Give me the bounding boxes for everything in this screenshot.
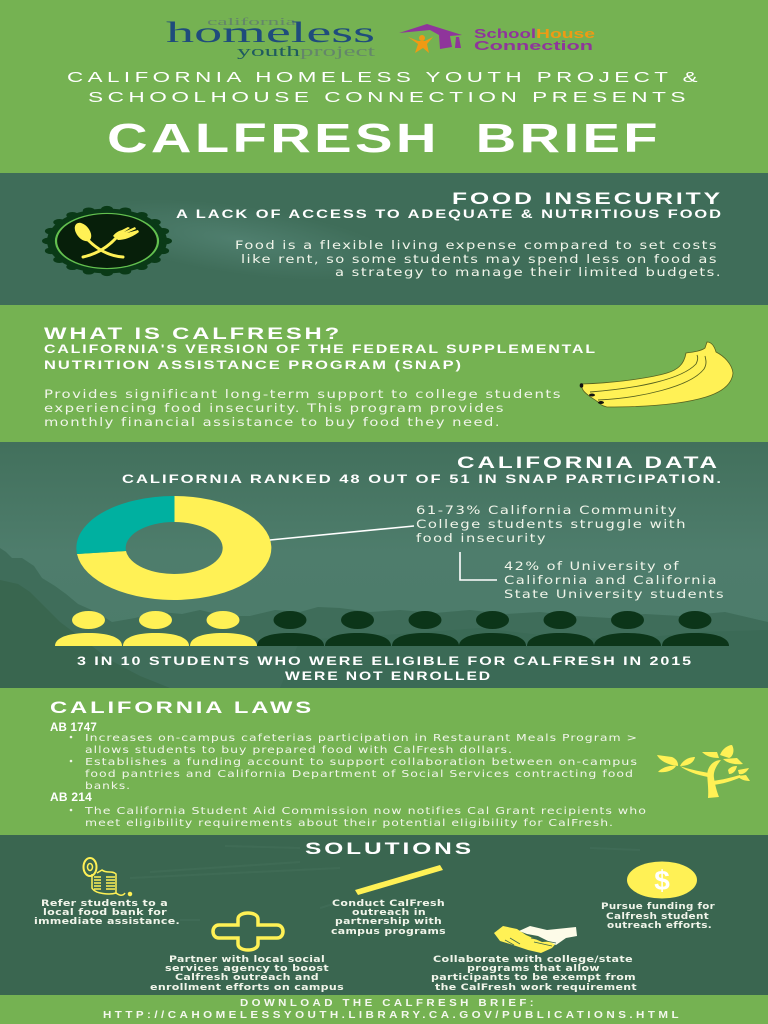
footer: download link: DOWNLOAD THE CALFRESH BRIEF: <box>240 998 537 1009</box>
presenter line: SCHOOLHOUSE CONNECTION PRESENTS <box>88 89 690 106</box>
panel: california data <box>0 442 768 688</box>
panel: solutions <box>0 835 768 995</box>
label: partnership with <box>335 917 442 927</box>
law: AB 1747: banks. <box>85 781 131 792</box>
law: AB 214: The California Student Aid Commission now notifies Cal Grant recipients who <box>84 806 647 817</box>
label: Conduct CalFresh <box>332 899 445 909</box>
title: CALFRESH BRIEF <box>107 115 661 161</box>
logo: SchoolHouse Connection: Connection <box>474 39 593 53</box>
label: services agency to boost <box>165 964 330 974</box>
presenter line: CALIFORNIA HOMELESS YOUTH PROJECT & <box>67 69 702 86</box>
callout: community college statistic <box>416 503 687 545</box>
law: AB 214 <box>50 790 647 829</box>
footer: download link: HTTP://CAHOMELESSYOUTH.LIBRARY.CA.GOV/PUBLICATIONS.HTML <box>103 1010 682 1021</box>
body text: like rent, so some students may spend less on food as <box>241 252 718 266</box>
law: AB 1747: Establishes a funding account to support collaboration between on-campus <box>85 757 638 768</box>
header <box>67 16 702 161</box>
solution: collaboration <box>431 926 638 993</box>
heading: CALIFORNIA LAWS <box>50 698 314 717</box>
callout connector <box>460 552 497 580</box>
label <box>431 955 638 993</box>
law: AB 1747: AB 1747 <box>50 720 97 734</box>
heading: CALIFORNIA DATA <box>457 453 720 472</box>
label <box>34 899 180 927</box>
footer: download link <box>103 998 682 1021</box>
label: outreach efforts. <box>607 921 712 931</box>
pictogram caption: WERE NOT ENROLLED <box>285 671 492 683</box>
label: programs that allow <box>467 964 600 974</box>
logo: SchoolHouse Connection: House <box>536 27 595 41</box>
body text: a strategy to manage their limited budgets. <box>335 265 722 279</box>
label <box>601 902 715 931</box>
label: enrollment efforts on campus <box>150 983 344 993</box>
body text: monthly financial assistance to buy food they need. <box>44 415 501 429</box>
icon: spoon and fork badge <box>47 209 167 273</box>
presenter line <box>67 69 702 106</box>
icon: ruler <box>355 865 443 895</box>
pictogram caption: 3 IN 10 STUDENTS WHO WERE ELIGIBLE FOR CALFRESH IN 2015 <box>77 656 693 668</box>
icon: tree <box>657 745 750 798</box>
law: AB 1747: food pantries and California Department of Social Services contracting food <box>85 769 634 780</box>
label: Collaborate with college/state <box>433 955 633 965</box>
law: AB 1747 <box>50 720 638 792</box>
label: campus programs <box>331 927 446 937</box>
callout: university statistic: California and California <box>504 573 718 587</box>
logo: SchoolHouse Connection: School <box>474 27 536 41</box>
label: Pursue funding for <box>601 902 715 912</box>
law: AB 1747: Increases on-campus cafeterias participation in Restaurant Meals Program > <box>85 733 638 744</box>
body text <box>44 387 562 429</box>
label: participants to be exempt from <box>431 973 636 983</box>
law: AB 1747: allows students to buy prepared food with CalFresh dollars. <box>85 745 513 756</box>
panel: what is calfresh <box>44 324 733 429</box>
subheading: CALIFORNIA'S VERSION OF THE FEDERAL SUPPLEMENTAL <box>44 344 597 356</box>
pictogram: 3 in 10 students <box>55 611 729 646</box>
logo: California Homeless Youth Project: project <box>300 44 376 60</box>
callout line <box>270 526 414 540</box>
heading: SOLUTIONS <box>305 839 474 858</box>
solution: funding <box>601 862 715 931</box>
callout: university statistic <box>504 559 725 601</box>
body text: experiencing food insecurity. This program provides <box>44 401 505 415</box>
label: Partner with local social <box>169 955 325 965</box>
pictogram caption <box>77 656 693 683</box>
label: outreach in <box>352 908 426 918</box>
logo: California Homeless Youth Project: youth <box>237 44 301 60</box>
body text <box>235 238 722 279</box>
body text: Provides significant long-term support to college students <box>44 387 562 401</box>
icon: dollar coin: $ <box>654 865 670 896</box>
icon: banana <box>580 342 733 407</box>
label: Refer students to a <box>41 899 168 909</box>
label <box>150 955 344 993</box>
icon: handshake <box>494 926 577 953</box>
label: Calfresh student <box>606 912 709 922</box>
law: AB 214: meet eligibility requirements about their potential eligibility for CalFresh. <box>85 818 614 829</box>
solution: food bank <box>34 858 180 927</box>
callout: university statistic: 42% of University of <box>504 559 680 573</box>
logo: California Homeless Youth Project <box>166 16 376 60</box>
donut chart <box>76 496 271 600</box>
body text: Food is a flexible living expense compared to set costs <box>235 238 718 252</box>
label <box>331 899 446 937</box>
icon: canned food <box>84 858 132 896</box>
callout: university statistic: State University students <box>504 587 725 601</box>
heading: WHAT IS CALFRESH? <box>44 324 342 343</box>
logo: California Homeless Youth Project: homeless <box>166 16 375 49</box>
label: local food bank for <box>43 908 167 918</box>
heading: FOOD INSECURITY <box>452 189 723 208</box>
panel: food insecurity <box>0 173 768 305</box>
solution: social services <box>150 913 344 993</box>
label: Calfresh outreach and <box>175 973 319 983</box>
icon: plus sign <box>213 913 283 950</box>
panel: california laws <box>50 698 750 829</box>
callout: community college statistic: food insecurity <box>416 531 547 545</box>
logo: SchoolHouse Connection <box>399 24 595 53</box>
callout: community college statistic: College students struggle with <box>416 517 687 531</box>
law: AB 214: AB 214 <box>50 790 92 804</box>
label: immediate assistance. <box>34 917 180 927</box>
subheading: A LACK OF ACCESS TO ADEQUATE & NUTRITIOUS FOOD <box>176 209 723 221</box>
subheading: CALIFORNIA RANKED 48 OUT OF 51 IN SNAP PARTICIPATION. <box>122 474 723 486</box>
subheading <box>44 344 597 372</box>
logo: California Homeless Youth Project: california <box>207 16 296 28</box>
callout: community college statistic: 61-73% California Community <box>416 503 678 517</box>
subheading: NUTRITION ASSISTANCE PROGRAM (SNAP) <box>44 360 463 372</box>
label: the CalFresh work requirement <box>435 983 638 993</box>
solution: campus outreach <box>331 865 446 937</box>
